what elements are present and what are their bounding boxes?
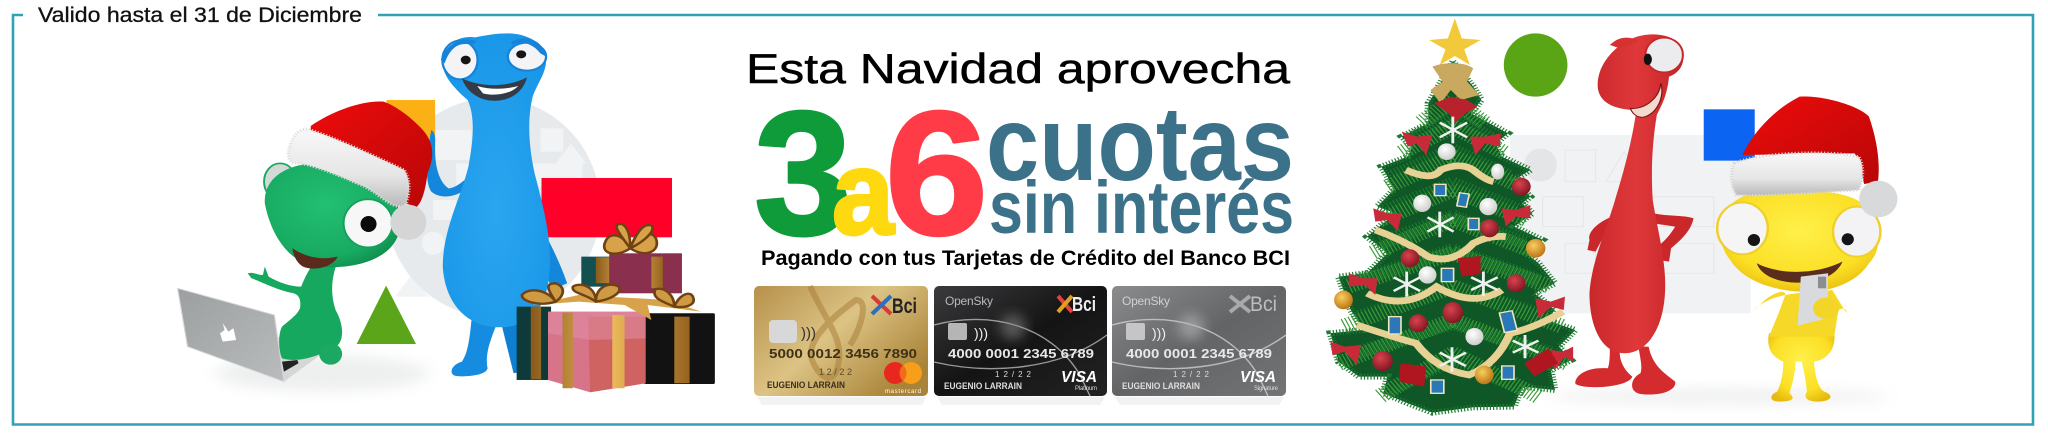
white ornaments — [1413, 143, 1504, 345]
mascot: yellow with santa hat — [1717, 96, 1898, 402]
card: grey visa signature: 12/22 — [1173, 370, 1210, 379]
red ornaments — [1372, 178, 1531, 371]
snowflakes — [1394, 117, 1538, 372]
card: black visa platinum — [934, 286, 1107, 396]
card: gold mastercard — [754, 286, 928, 396]
card: black visa platinum: ))) — [974, 325, 988, 341]
card: black visa platinum: OpenSky — [945, 294, 993, 308]
green circle — [1504, 33, 1567, 97]
green triangle — [357, 286, 416, 344]
mascot: blue — [427, 33, 567, 376]
card: black visa platinum: Platinum — [1075, 386, 1097, 392]
card: grey visa signature: Bci — [1250, 293, 1277, 316]
grey pattern panel — [1510, 135, 1751, 313]
blue drums — [1389, 184, 1517, 393]
mascot: green with santa hat — [248, 101, 432, 365]
mascot: red — [1575, 34, 1694, 395]
validity label: Valido hasta el 31 de Diciembre — [38, 4, 362, 27]
digit 3: 3 — [754, 76, 852, 272]
offer lockup: 3 a 6 cuotas sin interés — [754, 76, 1294, 272]
letter a: a — [832, 126, 895, 260]
gift stack — [517, 224, 715, 392]
card: grey visa signature — [1112, 286, 1286, 396]
star — [1429, 18, 1481, 65]
subheading: Pagando con tus Tarjetas de Crédito del Banco BCI — [761, 247, 1290, 270]
card: gold mastercard: 12/22 — [819, 367, 852, 377]
card: grey visa signature: 4000 0001 2345 6789 — [1126, 346, 1272, 361]
card: gold mastercard: Bci — [892, 295, 917, 318]
blue square — [1704, 109, 1755, 161]
heading: Esta Navidad aprovecha — [746, 45, 1291, 92]
top bow — [1430, 63, 1479, 103]
card: gold mastercard: ))) — [801, 325, 816, 342]
card: black visa platinum: Bci — [1072, 294, 1096, 316]
card reflections — [757, 397, 1284, 405]
card: gold mastercard: mastercard — [885, 389, 921, 395]
red bows — [1330, 132, 1573, 370]
digit 6: 6 — [885, 76, 988, 272]
laptop — [178, 288, 320, 382]
sin interés: sin interés — [989, 166, 1294, 249]
card: grey visa signature: VISA — [1240, 369, 1276, 386]
card: black visa platinum: EUGENIO LARRAIN — [944, 381, 1022, 391]
ground shadow — [1547, 389, 1889, 405]
christmas tree — [1330, 18, 1575, 413]
card: grey visa signature: Signature — [1254, 386, 1279, 392]
cuotas: cuotas — [986, 85, 1294, 203]
card: black visa platinum: 12/22 — [995, 370, 1032, 379]
right illustration: tree, mascots, shapes — [1330, 18, 1898, 413]
red rectangle — [542, 178, 672, 237]
red gifts — [1399, 256, 1558, 387]
yellow square — [387, 100, 435, 147]
left illustration: mascots, gifts, shapes — [178, 33, 715, 392]
ground shadow — [215, 355, 429, 392]
gold ornaments — [1334, 239, 1545, 384]
card: grey visa signature: ))) — [1152, 325, 1166, 341]
card: gold mastercard: EUGENIO LARRAIN — [767, 380, 845, 390]
card: black visa platinum: VISA — [1061, 369, 1097, 386]
card: grey visa signature: EUGENIO LARRAIN — [1122, 381, 1200, 391]
card: gold mastercard: 5000 0012 3456 7890 — [769, 346, 917, 361]
card: black visa platinum: 4000 0001 2345 6789 — [948, 346, 1094, 361]
card: grey visa signature: OpenSky — [1122, 294, 1170, 308]
grey pattern circle — [386, 98, 600, 317]
